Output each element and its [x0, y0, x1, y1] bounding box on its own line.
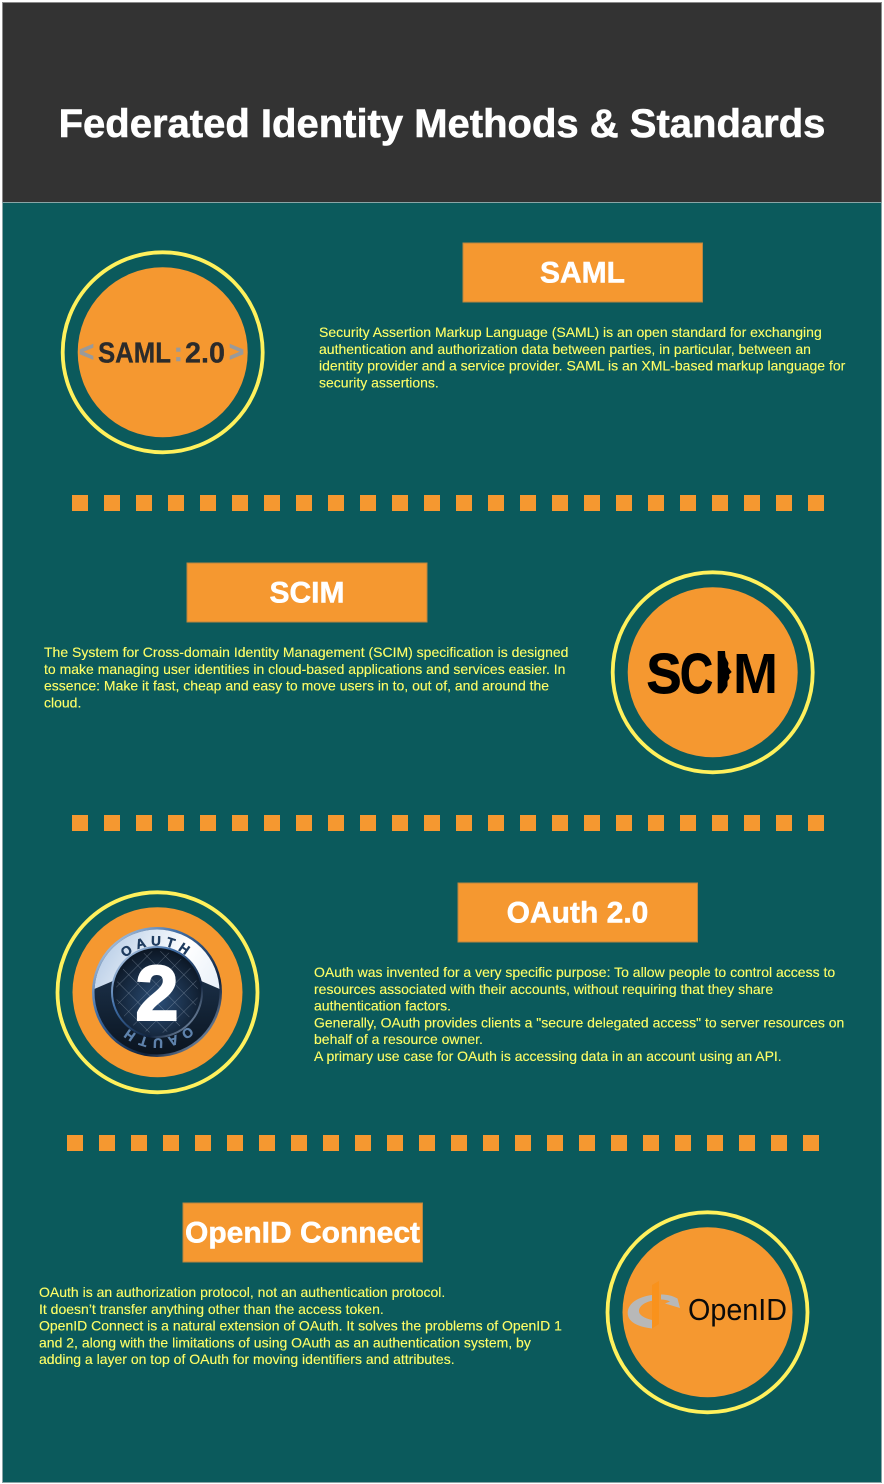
icon: SCIM logo: S: [646, 642, 682, 706]
icon: SAML 2.0 logo: :: [174, 337, 183, 367]
text block: SCIM description: The System for Cross-domain Identity Management (SCIM) specification is designed: [44, 644, 568, 660]
divider 2: [72, 815, 824, 831]
title: Federated Identity Methods & Standards: [59, 102, 825, 146]
heading: OAuth 2.0: [458, 883, 698, 942]
panel: OAuth 2.0: [56, 882, 844, 1094]
text block: OAuth description: behalf of a resource owner.: [314, 1031, 483, 1047]
icon: SAML 2.0 logo: >: [229, 336, 244, 367]
icon: OAuth 2 badge: OAUTH: [121, 936, 190, 956]
heading: SCIM: [187, 563, 427, 622]
header band: [2, 2, 882, 202]
text block: OAuth description: resources associated with their accounts, without requiring that they share: [314, 981, 773, 997]
text block: SCIM description: cloud.: [44, 694, 81, 710]
panel: SCIM: [44, 563, 813, 772]
text block: SAML description: Security Assertion Markup Language (SAML) is an open standard for exchanging: [319, 324, 822, 340]
text block: SCIM description: essence: Make it fast, cheap and easy to move users in to, out of, and around the: [44, 678, 549, 694]
text block: OpenID Connect description: OpenID Connect is a natural extension of OAuth. It solves the problems of OpenID 1: [39, 1318, 562, 1334]
text block: SCIM description: to make managing user identities in cloud-based applications and services easier. In: [44, 661, 565, 677]
icon: SCIM logo: M: [733, 642, 778, 706]
icon: SAML 2.0 logo: 2.0: [185, 337, 225, 369]
heading: OpenID Connect: OpenID Connect: [185, 1216, 420, 1250]
text block: OAuth description: authentication factors.: [314, 998, 451, 1014]
panel: OpenID Connect: [39, 1203, 808, 1412]
panel: SAML: [63, 243, 849, 452]
divider 3: [67, 1135, 819, 1151]
text block: OpenID Connect description: It doesn’t transfer anything other than the access token.: [39, 1301, 384, 1317]
text block: OAuth description: Generally, OAuth provides clients a "secure delegated access" to server resources on: [314, 1014, 844, 1030]
heading: SCIM: SCIM: [270, 576, 344, 610]
text block: OAuth description: A primary use case for OAuth is accessing data in an account using an API.: [314, 1048, 782, 1064]
text block: OAuth description: OAuth was invented for a very specific purpose: To allow people to control access to: [314, 964, 835, 980]
heading: OAuth 2.0: OAuth 2.0: [507, 896, 648, 930]
divider 1: [72, 495, 824, 511]
text block: SAML description: identity provider and a service provider. SAML is an XML-based markup language for: [319, 358, 846, 374]
heading: SAML: SAML: [540, 256, 625, 290]
text block: OpenID Connect description: OAuth is an authorization protocol, not an authentication protocol.: [39, 1284, 445, 1300]
icon: SAML 2.0 logo: SAML: [98, 337, 171, 369]
icon: SAML 2.0 logo: [63, 252, 263, 452]
text block: OpenID Connect description: adding a layer on top of OAuth for moving identifiers and attributes.: [39, 1351, 455, 1367]
icon: OpenID logo: [608, 1212, 808, 1412]
icon: SCIM logo: [613, 572, 813, 772]
icon: OpenID logo: OpenID: [688, 1293, 787, 1327]
icon: SCIM logo: C: [680, 642, 713, 706]
icon: SAML 2.0 logo: <: [79, 336, 94, 367]
icon: OAuth 2 badge: 2: [135, 949, 179, 1037]
text block: SAML description: authentication and authorization data between parties, in particular, between an: [319, 341, 811, 357]
text block: SAML description: security assertions.: [319, 374, 439, 390]
icon: OAuth 2 badge: [56, 890, 260, 1094]
icon: OAuth 2 badge: OAUTH: [124, 1028, 193, 1048]
heading: SAML: [463, 243, 702, 302]
text block: OpenID Connect description: and 2, along with the limitations of using OAuth as an authentication system, by: [39, 1334, 531, 1350]
heading: OpenID Connect: [183, 1203, 422, 1262]
